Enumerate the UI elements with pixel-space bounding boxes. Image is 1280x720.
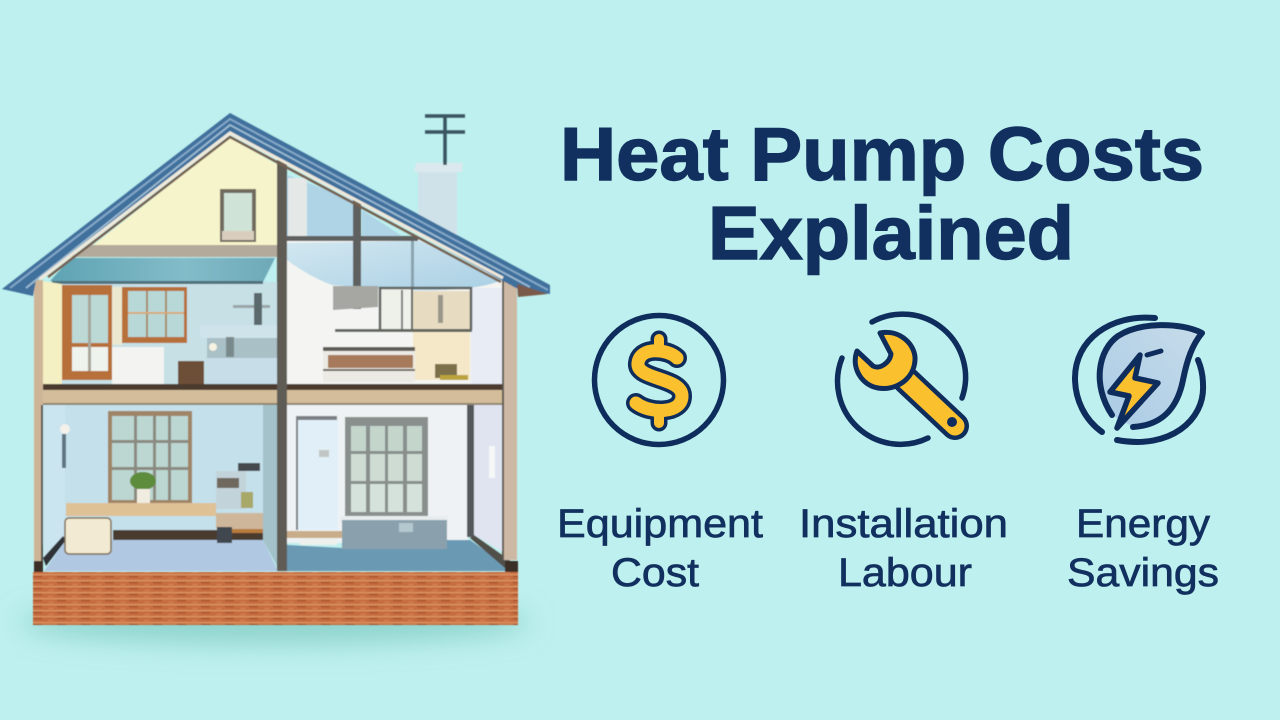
upper right beige wall bbox=[413, 332, 470, 380]
upper left room back wall bbox=[42, 282, 277, 388]
desk appliance bbox=[216, 463, 260, 509]
lower partition post bbox=[467, 405, 474, 537]
label line 1: Energy bbox=[1076, 502, 1210, 546]
white curtain area bbox=[288, 178, 307, 236]
chimney bbox=[414, 163, 463, 235]
cream wall pier bbox=[112, 287, 122, 345]
door bbox=[296, 416, 338, 530]
wall light bbox=[489, 446, 495, 478]
lower right white wall bbox=[287, 405, 468, 543]
wall lamp bbox=[60, 424, 70, 468]
lower left back wall bbox=[42, 405, 276, 545]
label line 2: Labour bbox=[838, 551, 972, 595]
label: installation labour bbox=[799, 502, 1008, 595]
roof bbox=[2, 113, 550, 296]
upper right glass ceiling bbox=[287, 241, 502, 290]
title bbox=[560, 112, 1204, 275]
extractor hood bbox=[333, 286, 378, 310]
upper left yellow side wall bbox=[42, 281, 62, 388]
lower right side wall bbox=[474, 405, 503, 552]
lower left partition wall bbox=[263, 405, 277, 566]
icon: dollar coin bbox=[594, 316, 724, 444]
kitchen window bbox=[380, 288, 471, 330]
structural beams bbox=[287, 197, 418, 309]
attic window bbox=[220, 189, 256, 242]
floor decor items bbox=[435, 364, 468, 380]
icon: wrench bbox=[838, 314, 966, 444]
lower right floor bbox=[286, 540, 505, 571]
upper left tall window bbox=[62, 285, 112, 380]
attic floor beam bbox=[70, 245, 280, 257]
icon: energy leaf bbox=[1075, 318, 1203, 442]
potted plant bbox=[130, 472, 156, 503]
ceiling shadow line bbox=[52, 281, 263, 284]
corner base bbox=[34, 561, 43, 572]
upper left teal ceiling bbox=[50, 258, 275, 282]
central post bbox=[277, 160, 287, 571]
lower right window bbox=[345, 417, 428, 516]
upper right white wall bbox=[287, 240, 503, 386]
right outer wall bbox=[504, 279, 517, 560]
lower left window bbox=[108, 411, 192, 504]
title line 1: Heat Pump Costs bbox=[560, 112, 1204, 196]
door step bbox=[287, 531, 342, 545]
title line 2: Explained bbox=[708, 191, 1074, 275]
kitchen counter line bbox=[335, 329, 472, 332]
right glass gable pane bbox=[362, 210, 402, 236]
attic gable wall bbox=[92, 138, 278, 246]
label: energy savings bbox=[1067, 502, 1219, 595]
upper right side wall bbox=[471, 288, 503, 384]
middle floor slab bbox=[35, 390, 517, 403]
label: equipment cost bbox=[557, 502, 763, 595]
house ground shadow bbox=[20, 600, 530, 644]
left outer wall bbox=[34, 280, 43, 561]
upper left wide window bbox=[122, 287, 187, 343]
label line 2: Cost bbox=[611, 551, 699, 595]
lower right skirting bbox=[470, 535, 512, 568]
upper floor boards bbox=[42, 384, 503, 390]
label line 1: Installation bbox=[799, 502, 1008, 546]
lower left small stool bbox=[217, 527, 232, 543]
stairs bbox=[178, 361, 204, 386]
island cabinet bbox=[323, 347, 415, 382]
bench bbox=[340, 516, 448, 549]
right eave underside bbox=[517, 284, 548, 297]
pouf bbox=[65, 518, 111, 554]
white appliance box bbox=[112, 347, 164, 387]
upper left glass gable pane bbox=[287, 175, 353, 236]
illustration: house cross-section bbox=[2, 113, 550, 625]
label line 1: Equipment bbox=[557, 502, 763, 546]
kitchen unit bbox=[200, 293, 277, 387]
lower left desk bbox=[66, 503, 266, 540]
label line 2: Savings bbox=[1067, 551, 1219, 595]
brick foundation bbox=[33, 572, 518, 625]
lower left side wall bbox=[44, 405, 65, 558]
lower left dark skirting bbox=[43, 536, 66, 566]
antenna bbox=[425, 116, 465, 165]
lower left floor bbox=[44, 540, 278, 571]
